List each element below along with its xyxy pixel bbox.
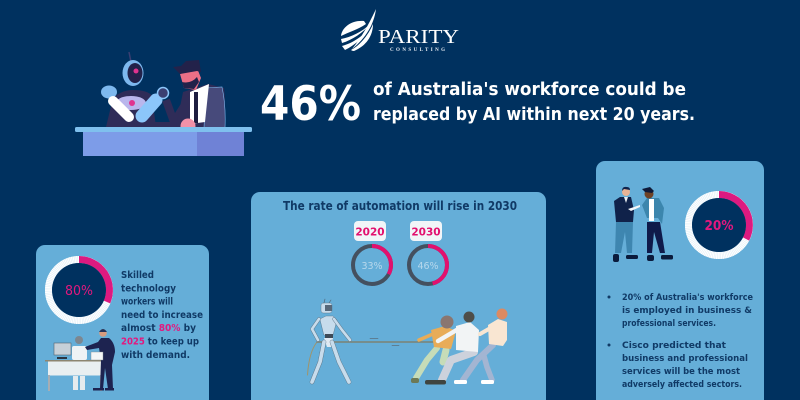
woman with red hair [454,308,508,384]
headline statistic: 46% [260,77,361,132]
desk [75,127,252,156]
panel: business and professional services [596,161,764,400]
text: skilled workers: technology [121,284,176,294]
text: skilled workers [121,270,203,361]
donut chart: 33%: 33% [361,261,383,272]
donut chart: 80% [48,260,110,320]
logo: Parity Consulting: PARITY [378,26,459,48]
panel: rate of automation [251,192,546,400]
man in white shirt [425,312,479,384]
bullet list: 20% of Australia's workforce [622,293,753,303]
rope [308,342,317,375]
bullet list: is employed in business & [622,306,752,316]
illustration: two business people talking [613,187,673,262]
text: skilled workers: Skilled [121,270,154,281]
bullet list [608,293,753,390]
text: skilled workers: workers will [121,296,173,308]
text: skilled workers: 2025 to keep up [121,336,199,348]
bullet list: Cisco predicted that [622,341,727,351]
logo: Parity Consulting: CONSULTING [390,48,445,53]
robot [312,299,350,382]
illustration: robot and manager at desk [45,329,115,391]
donut chart: 80%: 80% [65,283,93,299]
robot [101,52,168,127]
man [142,60,225,134]
donut chart: 20%: 20% [704,218,734,234]
text: skilled workers: almost 80% by [121,323,196,334]
logo: Parity Consulting [341,9,459,53]
badge: 2020: 2020 [355,226,385,238]
donut chart: 33% [353,246,391,284]
bullet list: adversely affected sectors. [622,380,742,390]
illustration: robot and people in tug of war [308,299,508,384]
heading: The rate of automation will rise in 2030 [283,198,517,213]
headline text [373,79,695,125]
text: skilled workers: with demand. [121,350,190,361]
donut chart: 46%: 46% [417,261,439,272]
badge: 2030: 2030 [411,226,441,238]
bullet list: services will be the most [622,367,741,377]
donut chart: 20% [688,194,750,256]
panel: skilled technology workers [36,245,209,400]
donut chart: 46% [409,246,447,284]
bullet list: professional services. [622,319,716,329]
text: skilled workers: need to increase [121,310,203,321]
woman [411,316,456,383]
bullet list: business and professional [622,354,748,364]
badge: 2020 [354,221,386,241]
headline text: replaced by AI within next 20 years. [373,104,695,125]
headline text: of Australia's workforce could be [373,79,686,100]
illustration: robot and man arm wrestling at desk [75,52,252,156]
badge: 2030 [410,221,442,241]
